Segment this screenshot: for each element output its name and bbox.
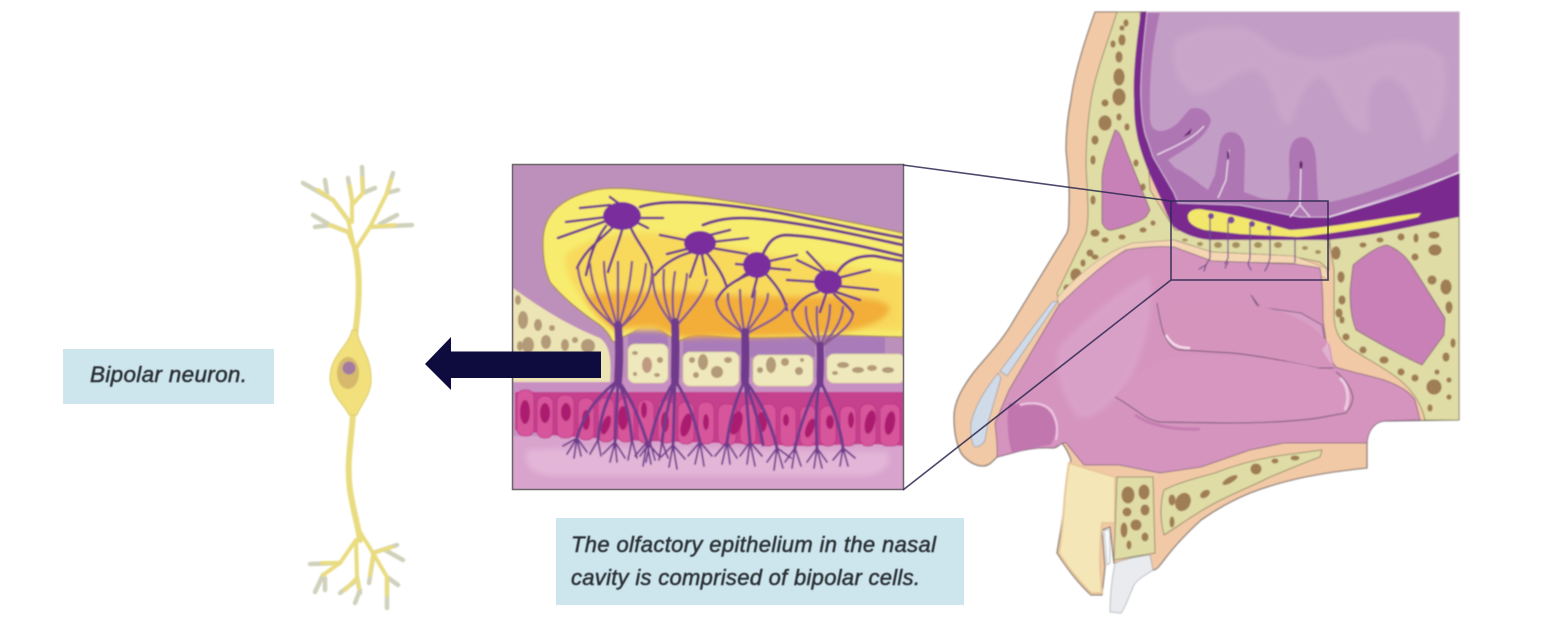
callout box outline: zoomed region on nose — [903, 165, 1328, 490]
mucosa layers — [513, 378, 903, 490]
cavity highlight — [1056, 275, 1152, 418]
incisor teeth — [1104, 530, 1153, 613]
brain lighter gyri — [1173, 26, 1447, 145]
callout: olfactory epithelium caption: The olfactory epithelium in the nasal — [571, 532, 937, 557]
lower pointer line — [903, 280, 1171, 490]
sulci dark clefts — [1183, 128, 1302, 169]
brain dura dark band — [1134, 12, 1459, 240]
lower dendrites — [310, 545, 403, 608]
skin silhouette — [954, 12, 1459, 595]
inset border — [512, 164, 904, 490]
olfactory fibers neuron 4 — [785, 252, 903, 468]
cell body stars — [603, 202, 842, 294]
olfactory bulb — [1188, 209, 1421, 237]
upper dendrite cores — [318, 178, 395, 250]
sulci lines — [1157, 126, 1459, 217]
upper process — [355, 248, 359, 335]
middle turbinate edge — [1157, 303, 1334, 368]
upper lip — [1059, 463, 1115, 593]
bone blocks — [628, 344, 905, 386]
orange inner zone — [585, 292, 890, 338]
brain medium band — [1141, 12, 1459, 217]
maxilla bone block — [1114, 477, 1155, 560]
panel: olfactory epithelium detail — [512, 164, 905, 490]
middle turbinate — [1157, 303, 1334, 368]
olfactory fibers neuron 2 — [640, 218, 903, 469]
nasal vestibule — [1008, 403, 1057, 453]
palate bone — [1161, 450, 1322, 535]
upper dendrites — [303, 167, 412, 232]
right bone — [1329, 215, 1459, 420]
lower dendrite cores — [322, 532, 392, 595]
callout: bipolar neuron label — [63, 349, 274, 404]
cell body — [330, 330, 371, 415]
cribriform plate — [1057, 238, 1329, 305]
callout: bipolar neuron label: Bipolar neuron. — [90, 362, 247, 387]
yellow olfactory bulb — [543, 188, 903, 342]
mid yellow zone — [565, 233, 903, 330]
cribriform fibers — [1199, 218, 1295, 271]
nucleus — [337, 357, 359, 389]
arrow — [425, 337, 601, 390]
upper pointer line — [903, 165, 1171, 201]
brain light region — [1150, 12, 1459, 202]
olfactory fibers neuron 1 — [558, 197, 903, 466]
bone cavities — [632, 351, 894, 378]
olfactory bulb neurons — [1208, 213, 1272, 230]
callout: olfactory epithelium caption: cavity is comprised of bipolar cells. — [571, 565, 920, 590]
region rectangle — [1171, 201, 1328, 280]
upper turbinate — [1251, 295, 1327, 352]
frontal sinus — [1102, 130, 1150, 230]
panel: nasal cavity sagittal section — [954, 12, 1459, 613]
upper bone — [1057, 12, 1329, 303]
stripes between bulb and bone — [628, 330, 885, 357]
sphenoid sinus — [1350, 245, 1445, 365]
callout: olfactory epithelium caption — [556, 518, 964, 605]
lower process — [349, 412, 360, 540]
nasal cavity mucosa — [995, 247, 1420, 473]
inferior turbinate — [1115, 355, 1353, 423]
inferior turbinate edge — [1115, 372, 1353, 423]
bone left — [513, 288, 611, 382]
icon: bipolar neuron — [303, 167, 412, 608]
nasal cartilage — [971, 301, 1058, 447]
olfactory fibers neuron 3 — [715, 235, 903, 470]
epithelium cells — [515, 390, 905, 446]
